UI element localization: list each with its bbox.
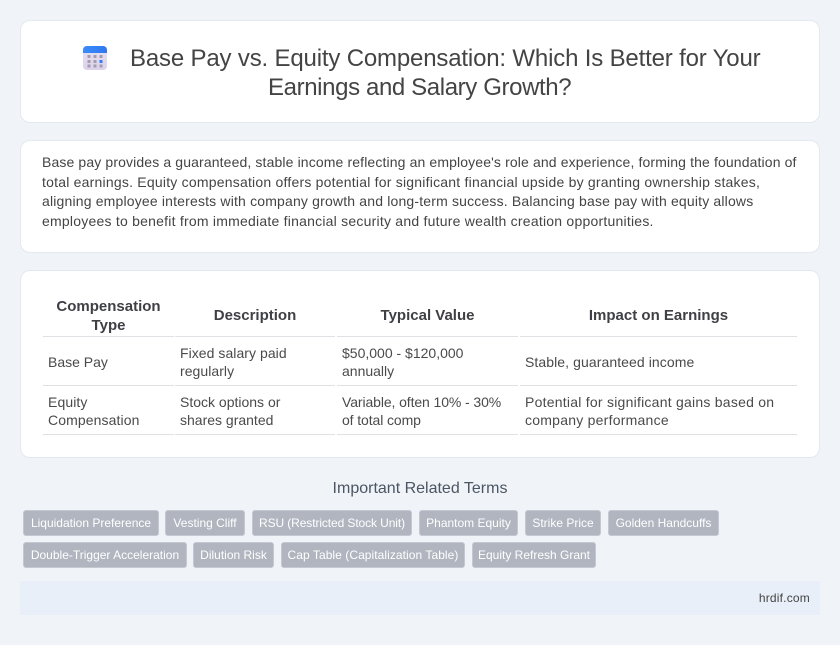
comparison table card: Description — [214, 307, 296, 324]
comparison table card: Impact on Earnings — [589, 307, 728, 324]
intro text: total earnings. Equity compensation offers potential for significant financial upside by granting ownership stakes, — [42, 174, 760, 190]
icon: calendar — [83, 46, 107, 70]
comparison table card: regularly — [180, 363, 234, 379]
related terms tags: Equity Refresh Grant — [478, 548, 590, 562]
row: base pay: Base Pay — [48, 354, 108, 370]
related terms tags: Strike Price — [532, 516, 594, 530]
related terms tags: Golden Handcuffs — [616, 516, 711, 530]
comparison table card: company performance — [525, 412, 669, 428]
related terms tags: RSU (Restricted Stock Unit) — [259, 516, 405, 530]
row: equity compensation: Compensation — [48, 412, 139, 428]
comparison table card: Potential for significant gains based on — [525, 394, 774, 410]
title: Earnings and Salary Growth? — [268, 74, 571, 101]
related terms heading: Important Related Terms — [333, 480, 507, 497]
footer site label: hrdif.com — [759, 591, 810, 605]
related terms tags: Cap Table (Capitalization Table) — [288, 548, 458, 562]
related terms tags: Dilution Risk — [200, 548, 267, 562]
footer bar — [20, 581, 820, 615]
related terms tags: Vesting Cliff — [173, 516, 237, 530]
related terms tags: Double-Trigger Acceleration — [31, 548, 179, 562]
table header — [56, 298, 161, 334]
intro text: aligning employee interests with company growth and long-term success. Balancing base pay with equity allows — [42, 193, 753, 209]
comparison table card: Variable, often 10% - 30% — [342, 394, 501, 410]
table header: Type — [92, 317, 125, 334]
comparison table card: $50,000 - $120,000 — [342, 345, 463, 361]
related terms tags: Liquidation Preference — [31, 516, 151, 530]
intro text: employees to benefit from immediate financial security and future wealth creation opportunities. — [42, 213, 654, 229]
related terms tags — [23, 510, 719, 568]
related terms tags: Phantom Equity — [426, 516, 511, 530]
comparison table card: of total comp — [342, 412, 421, 428]
intro text: Base pay provides a guaranteed, stable income reflecting an employee's role and experience, forming the foundation of — [42, 154, 797, 170]
table header: Compensation — [56, 298, 161, 315]
header card — [20, 20, 820, 123]
row: equity compensation — [48, 394, 139, 428]
intro text — [42, 154, 797, 229]
row: equity compensation: Equity — [48, 394, 88, 410]
comparison table card: Fixed salary paid — [180, 345, 287, 361]
title — [130, 45, 760, 101]
title: Base Pay vs. Equity Compensation: Which Is Better for Your — [130, 45, 760, 72]
comparison table card: Stock options or — [180, 394, 280, 410]
comparison table card: Typical Value — [381, 307, 474, 324]
comparison table card: Stable, guaranteed income — [525, 354, 694, 370]
intro paragraph card — [20, 140, 820, 253]
comparison table card: shares granted — [180, 412, 273, 428]
comparison table card: annually — [342, 363, 394, 379]
comparison table card — [20, 270, 820, 458]
